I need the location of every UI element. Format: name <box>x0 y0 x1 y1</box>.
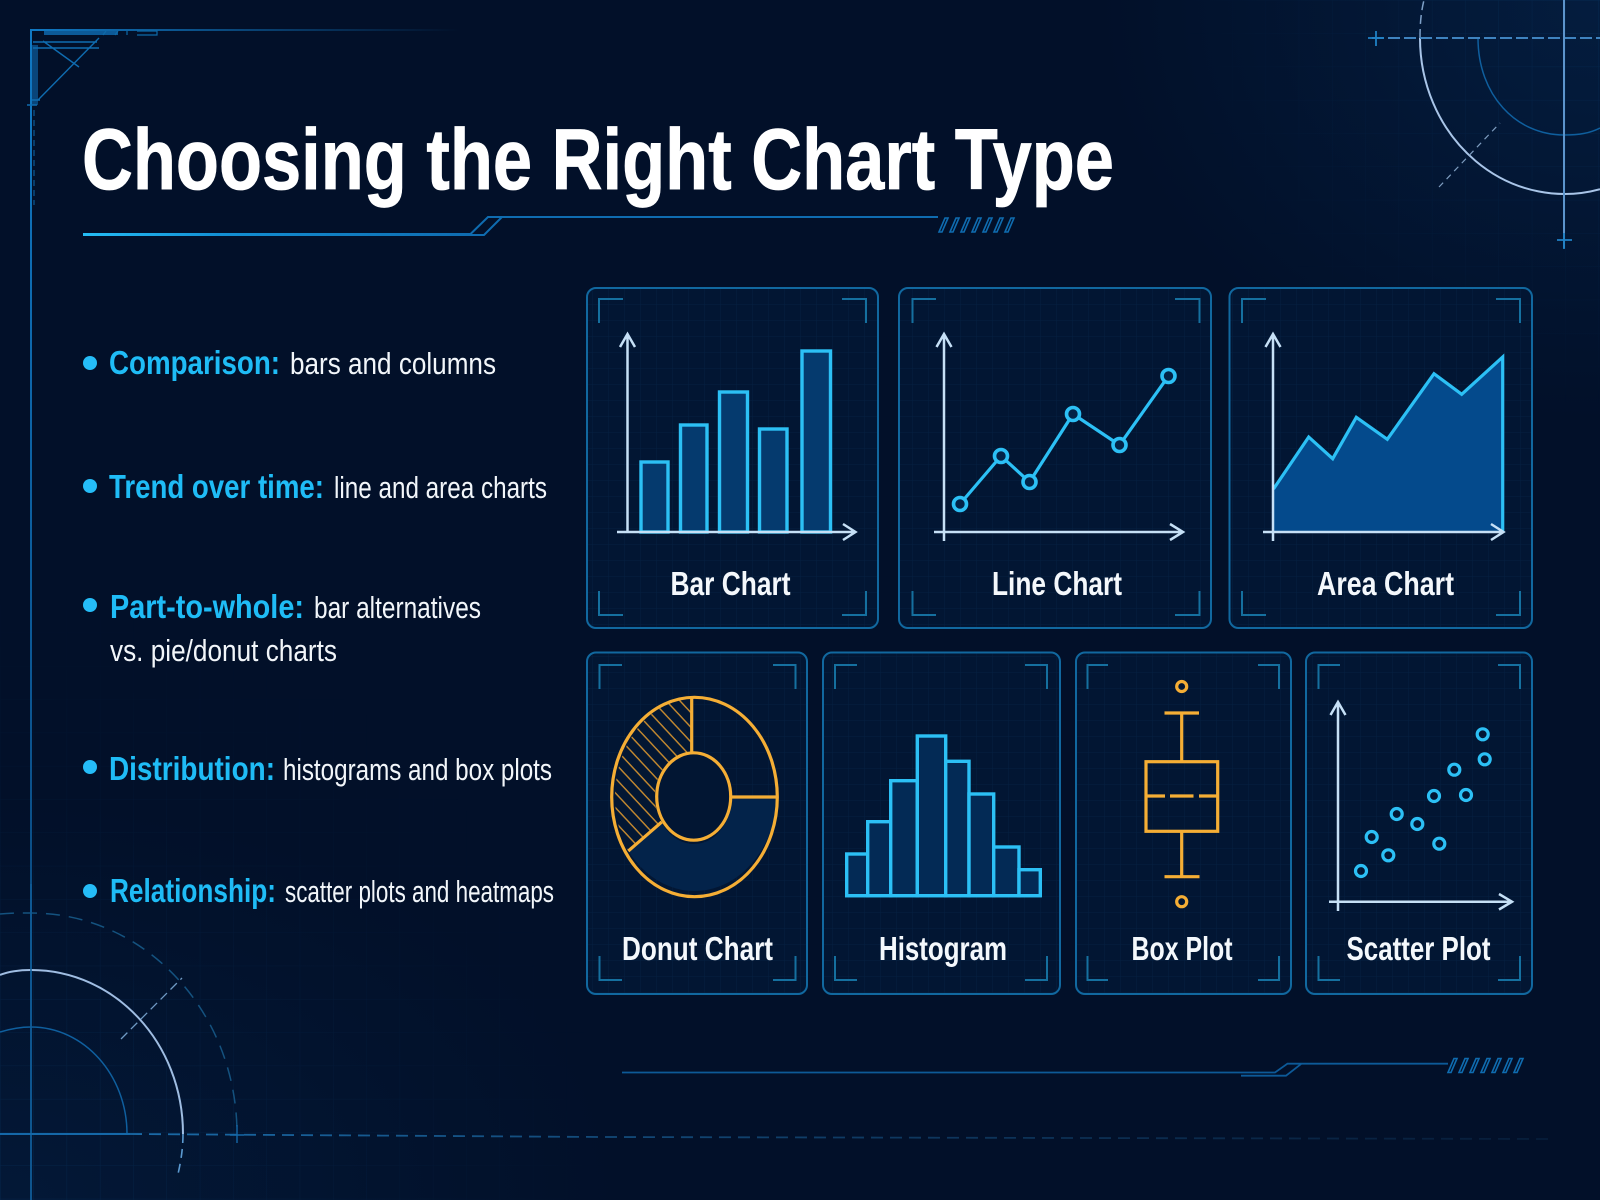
bullet: trend over time: Trend over time: <box>109 468 324 505</box>
panel: bar chart <box>587 288 878 628</box>
bullet: part-to-whole: vs. pie/donut charts <box>110 633 337 668</box>
label: Donut Chart <box>622 930 773 967</box>
blueprint: bottom left <box>0 884 1550 1200</box>
label: Histogram <box>879 930 1007 967</box>
bullet: comparison: bars and columns <box>290 346 496 381</box>
panel: line chart <box>899 288 1211 628</box>
bullet: distribution <box>83 750 552 787</box>
bullet: trend over time <box>83 468 547 505</box>
label: Area Chart <box>1317 565 1454 602</box>
blueprint: top right <box>1368 0 1600 249</box>
area <box>1274 357 1503 532</box>
axes <box>1263 334 1504 541</box>
histogram bars <box>845 736 1041 896</box>
bullet: relationship: scatter plots and heatmaps <box>285 874 554 909</box>
title underline <box>83 217 1014 236</box>
scatter points <box>1356 729 1490 876</box>
corner frame: top left <box>27 29 460 1200</box>
bullet: part-to-whole: bar alternatives <box>314 590 481 625</box>
panel: area chart <box>1230 288 1532 628</box>
label: Bar Chart <box>670 565 791 602</box>
panel: donut chart <box>587 652 807 994</box>
bullet: comparison <box>83 344 496 381</box>
bars <box>641 351 830 532</box>
axes <box>617 334 856 540</box>
panel: scatter plot <box>1306 652 1532 994</box>
label: Line Chart <box>992 565 1122 602</box>
bullet: relationship: Relationship: <box>110 872 276 909</box>
title: Choosing the Right Chart Type <box>82 112 1114 208</box>
bullet: part-to-whole <box>83 588 481 668</box>
box and whiskers <box>1146 682 1218 907</box>
axes <box>934 334 1183 541</box>
bullet: distribution: histograms and box plots <box>283 752 552 787</box>
bullet: relationship <box>83 872 554 909</box>
bullet: trend over time: line and area charts <box>334 470 547 505</box>
label: Scatter Plot <box>1346 930 1491 967</box>
panel: histogram <box>823 652 1060 994</box>
bullet: part-to-whole: Part-to-whole: <box>110 588 304 625</box>
bullet: comparison: Comparison: <box>109 344 280 381</box>
bottom accent line <box>622 1058 1523 1076</box>
panel: box plot <box>1076 652 1291 994</box>
bullet list <box>83 344 554 909</box>
donut <box>612 697 777 897</box>
line series <box>954 370 1175 510</box>
label: Box Plot <box>1132 930 1233 967</box>
axes <box>1329 702 1512 911</box>
bullet: distribution: Distribution: <box>109 750 275 787</box>
